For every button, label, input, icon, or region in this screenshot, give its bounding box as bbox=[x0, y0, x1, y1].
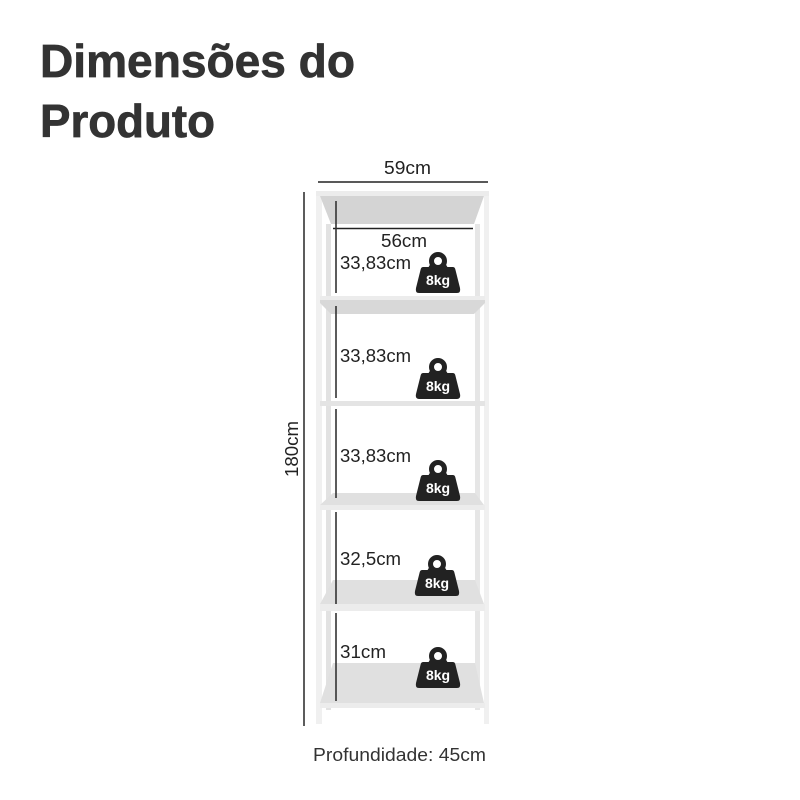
height dimension: 180cm: 180cm bbox=[282, 421, 302, 477]
front posts bbox=[316, 191, 489, 724]
shelf 1 bbox=[320, 296, 485, 314]
weight icon: shelf 1 bbox=[416, 254, 460, 293]
title bbox=[40, 35, 355, 147]
weight icon: shelf 3 bbox=[416, 462, 460, 501]
shelf height labels: 31cm bbox=[340, 642, 386, 662]
back posts bbox=[326, 224, 480, 710]
top cap bbox=[316, 191, 489, 224]
shelf height lines bbox=[335, 201, 337, 701]
shelf 3 bbox=[320, 493, 485, 510]
depth label: Profundidade: 45cm bbox=[313, 745, 486, 765]
weight icon: shelf 4: 8kg bbox=[425, 575, 449, 591]
shelf 2 bbox=[320, 401, 485, 406]
weight icon: shelf 2: 8kg bbox=[426, 378, 450, 394]
shelf 5 bbox=[320, 663, 485, 708]
weight icon: shelf 5: 8kg bbox=[426, 667, 450, 683]
shelf height labels: 33,83cm bbox=[340, 346, 411, 366]
shelf height labels: 33,83cm bbox=[340, 446, 411, 466]
weight icon: shelf 2 bbox=[416, 360, 460, 399]
shelf height labels: 33,83cm bbox=[340, 253, 411, 273]
shelf height labels bbox=[340, 253, 411, 662]
shelf height labels: 32,5cm bbox=[340, 549, 401, 569]
weight icon: shelf 4 bbox=[415, 558, 459, 596]
shelf unit bbox=[316, 191, 489, 724]
title: Produto bbox=[40, 95, 215, 147]
weight icon: shelf 5 bbox=[416, 650, 460, 688]
inner width dimension: 56cm bbox=[333, 228, 473, 251]
width dimension: 59cm: 59cm bbox=[384, 158, 431, 178]
inner width dimension: 56cm: 56cm bbox=[381, 231, 427, 251]
weight icon: shelf 3: 8kg bbox=[426, 480, 450, 496]
weight icon: shelf 1: 8kg bbox=[426, 272, 450, 288]
shelf 4 bbox=[320, 580, 485, 611]
title: Dimensões do bbox=[40, 35, 355, 87]
